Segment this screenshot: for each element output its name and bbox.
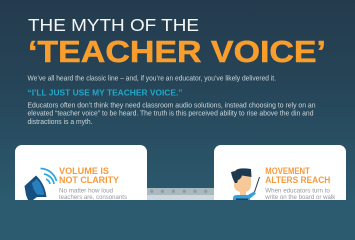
heading: NOT CLARITY bbox=[59, 175, 120, 185]
title: THE MYTH OF THE bbox=[28, 15, 199, 35]
text bbox=[59, 188, 127, 201]
text: No matter how loud bbox=[59, 188, 113, 194]
title: ‘TEACHER VOICE’ bbox=[28, 34, 326, 69]
heading: VOLUME IS bbox=[59, 166, 109, 176]
text: When educators turn to bbox=[265, 188, 330, 194]
text bbox=[264, 188, 336, 201]
icon: speaker bbox=[24, 168, 56, 200]
panel: volume is not clarity bbox=[15, 145, 147, 215]
title bbox=[28, 15, 326, 69]
body paragraph: elevated “teacher voice” to be heard. The truth is this perceived ability to rise above the din and bbox=[28, 111, 314, 118]
body paragraph bbox=[28, 102, 316, 126]
body paragraph: distractions is a myth. bbox=[28, 119, 93, 126]
quote heading: “I’LL JUST USE MY TEACHER VOICE.” bbox=[28, 88, 182, 98]
heading: ALTERS REACH bbox=[265, 175, 331, 185]
heading bbox=[265, 166, 331, 185]
icon: teacher bbox=[231, 168, 260, 201]
heading: MOVEMENT bbox=[265, 166, 310, 176]
intro text: We’ve all heard the classic line – and, if you’re an educator, you’ve likely delivered it. bbox=[28, 76, 276, 82]
connector strip bbox=[147, 188, 214, 200]
panel: movement alters reach bbox=[214, 145, 346, 215]
body paragraph: Educators often don’t think they need classroom audio solutions, instead choosing to rely on an bbox=[28, 102, 316, 110]
heading bbox=[59, 166, 120, 185]
